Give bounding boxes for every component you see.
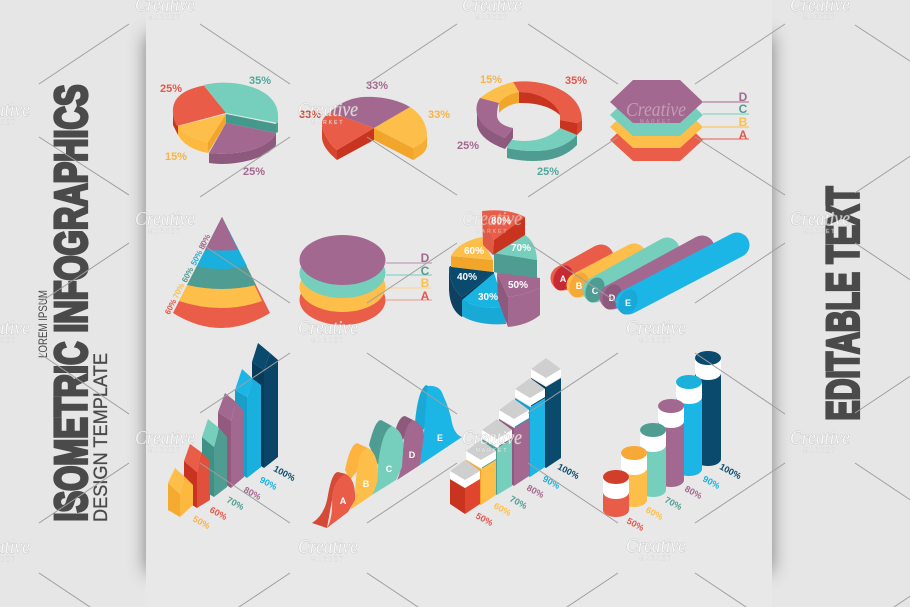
title: right vertical heading: EDITABLE TEXT (818, 186, 868, 420)
watermarks: creative market: MARKET (640, 119, 672, 125)
chart: stacked hexagons with A-D legend (610, 80, 749, 161)
legend lines and letters (386, 251, 432, 303)
watermarks: creative market: Creative (298, 317, 358, 339)
box bar labels: 80% (525, 483, 546, 500)
box bar labels: 70% (508, 494, 529, 511)
donut labels: 35% (565, 75, 587, 87)
pie labels: 33% (428, 109, 450, 121)
watermarks: creative market: MARKET (312, 557, 344, 563)
pie labels: 30% (478, 292, 498, 303)
pie labels: 33% (299, 109, 321, 121)
cylinder labels: 70% (663, 495, 684, 512)
watermarks: creative market: Creative (626, 535, 686, 557)
chart: exploded six-slice pie (449, 210, 540, 327)
chart: 3D pie with one slice removed (299, 80, 450, 160)
chart: isometric capped cylinders (603, 351, 743, 533)
box bar labels: 90% (541, 474, 562, 491)
cylinder letters (560, 274, 631, 308)
cone percentage labels: 50% (189, 249, 204, 267)
cylinder labels: 100% (718, 462, 743, 481)
watermarks: creative market: MARKET (312, 338, 344, 344)
legend lines and letters: B (421, 276, 430, 290)
panel: central sheet with side shadows (146, 0, 772, 607)
legend lines and letters: B (739, 115, 748, 129)
legend lines and letters: A (421, 289, 430, 303)
title: left vertical heading (38, 84, 112, 522)
chart: isometric cylinders A-E (550, 245, 737, 317)
box bar labels: 100% (556, 462, 581, 481)
watermarks: creative market: MARKET (476, 15, 508, 21)
column labels: 70% (225, 495, 246, 512)
wave letters (340, 433, 443, 506)
pie labels: 40% (457, 272, 477, 283)
watermarks: creative market: Creative (462, 208, 522, 230)
watermarks: creative market: MARKET (640, 338, 672, 344)
cone percentage labels: 70% (171, 282, 186, 300)
watermarks: creative market: Creative (626, 317, 686, 339)
watermarks: creative market: MARKET (804, 15, 836, 21)
legend lines and letters: C (421, 264, 430, 278)
chart: stacked discs with A-D legend (300, 235, 432, 325)
pie labels (160, 75, 271, 178)
legend lines and letters: D (421, 251, 430, 265)
wave letters: A (340, 496, 347, 506)
cone percentage labels: 60% (180, 266, 195, 284)
watermarks: creative market: Creative (135, 208, 195, 230)
column labels: 100% (272, 464, 297, 483)
cylinder letters: C (592, 286, 599, 296)
box bar labels: 60% (492, 501, 513, 518)
chart: 3D pie with four slices (160, 75, 278, 178)
column labels: 80% (242, 485, 263, 502)
chart: 3D donut (457, 74, 587, 178)
watermarks: creative market: MARKET (640, 556, 672, 562)
pie labels: 80% (491, 216, 511, 227)
watermarks: creative market: Creative (135, 427, 195, 449)
watermarks: creative market: Creative (462, 427, 522, 449)
donut labels: 15% (480, 74, 502, 86)
chart: striped cone (163, 217, 270, 328)
cone percentage labels: 80% (197, 233, 212, 251)
cylinder letters: E (625, 298, 631, 308)
pie labels: 70% (511, 243, 531, 254)
eyebrow: lorem ipsum: LOREM IPSUM (38, 290, 50, 358)
wave letters: B (363, 479, 370, 489)
cylinder labels: 50% (625, 516, 646, 533)
column labels: 50% (191, 514, 212, 531)
watermarks: creative market: MARKET (312, 120, 344, 126)
cylinder letters: D (609, 293, 616, 303)
chart: house-shaped isometric columns (168, 343, 297, 531)
subheading: design template: DESIGN TEMPLATE (91, 353, 112, 522)
pie labels: 25% (160, 83, 182, 95)
legend lines and letters: C (739, 102, 748, 116)
chart: isometric wave peaks A-E (312, 385, 462, 528)
watermarks: creative market: MARKET (476, 448, 508, 454)
pie labels: 35% (249, 75, 271, 87)
pie labels: 25% (243, 166, 265, 178)
wave letters: C (386, 464, 393, 474)
wave letters: E (437, 433, 443, 443)
watermarks: creative market: Creative (626, 99, 686, 121)
watermarks: creative market: Creative (298, 99, 358, 121)
box bar labels (474, 462, 581, 528)
pie labels (457, 216, 531, 303)
watermarks: creative market: MARKET (149, 15, 181, 21)
column labels (191, 464, 297, 531)
pie labels (299, 80, 450, 121)
cylinder labels (625, 462, 743, 533)
watermarks: creative market: Creative (790, 208, 850, 230)
watermarks: creative market: MARKET (149, 448, 181, 454)
donut labels: 25% (537, 166, 559, 178)
column labels: 60% (208, 505, 229, 522)
legend lines and letters (700, 90, 749, 142)
cylinder letters: A (560, 274, 567, 284)
pie labels: 15% (165, 151, 187, 163)
legend lines and letters: D (739, 90, 748, 104)
watermarks: creative market: Creative (298, 536, 358, 558)
cylinder letters: B (576, 281, 583, 291)
watermarks: creative market: Creative (790, 427, 850, 449)
pie labels: 50% (508, 280, 528, 291)
cylinder labels: 90% (701, 474, 722, 491)
donut labels (457, 74, 587, 178)
cylinder labels: 80% (683, 484, 704, 501)
column labels: 90% (258, 475, 279, 492)
cylinder labels: 60% (644, 505, 665, 522)
cone percentage labels: 60% (163, 298, 178, 316)
chart: isometric capped box bars (450, 358, 581, 528)
legend lines and letters: A (739, 128, 748, 142)
watermarks: creative market: MARKET (476, 229, 508, 235)
wave letters: D (409, 450, 416, 460)
box bar labels: 50% (474, 511, 495, 528)
cone percentage labels (163, 233, 212, 316)
watermarks: creative market: MARKET (804, 448, 836, 454)
donut labels: 25% (457, 140, 479, 152)
watermarks: creative market: MARKET (149, 229, 181, 235)
pie labels: 60% (464, 246, 484, 257)
pie labels: 33% (366, 80, 388, 92)
watermarks: creative market: MARKET (804, 229, 836, 235)
